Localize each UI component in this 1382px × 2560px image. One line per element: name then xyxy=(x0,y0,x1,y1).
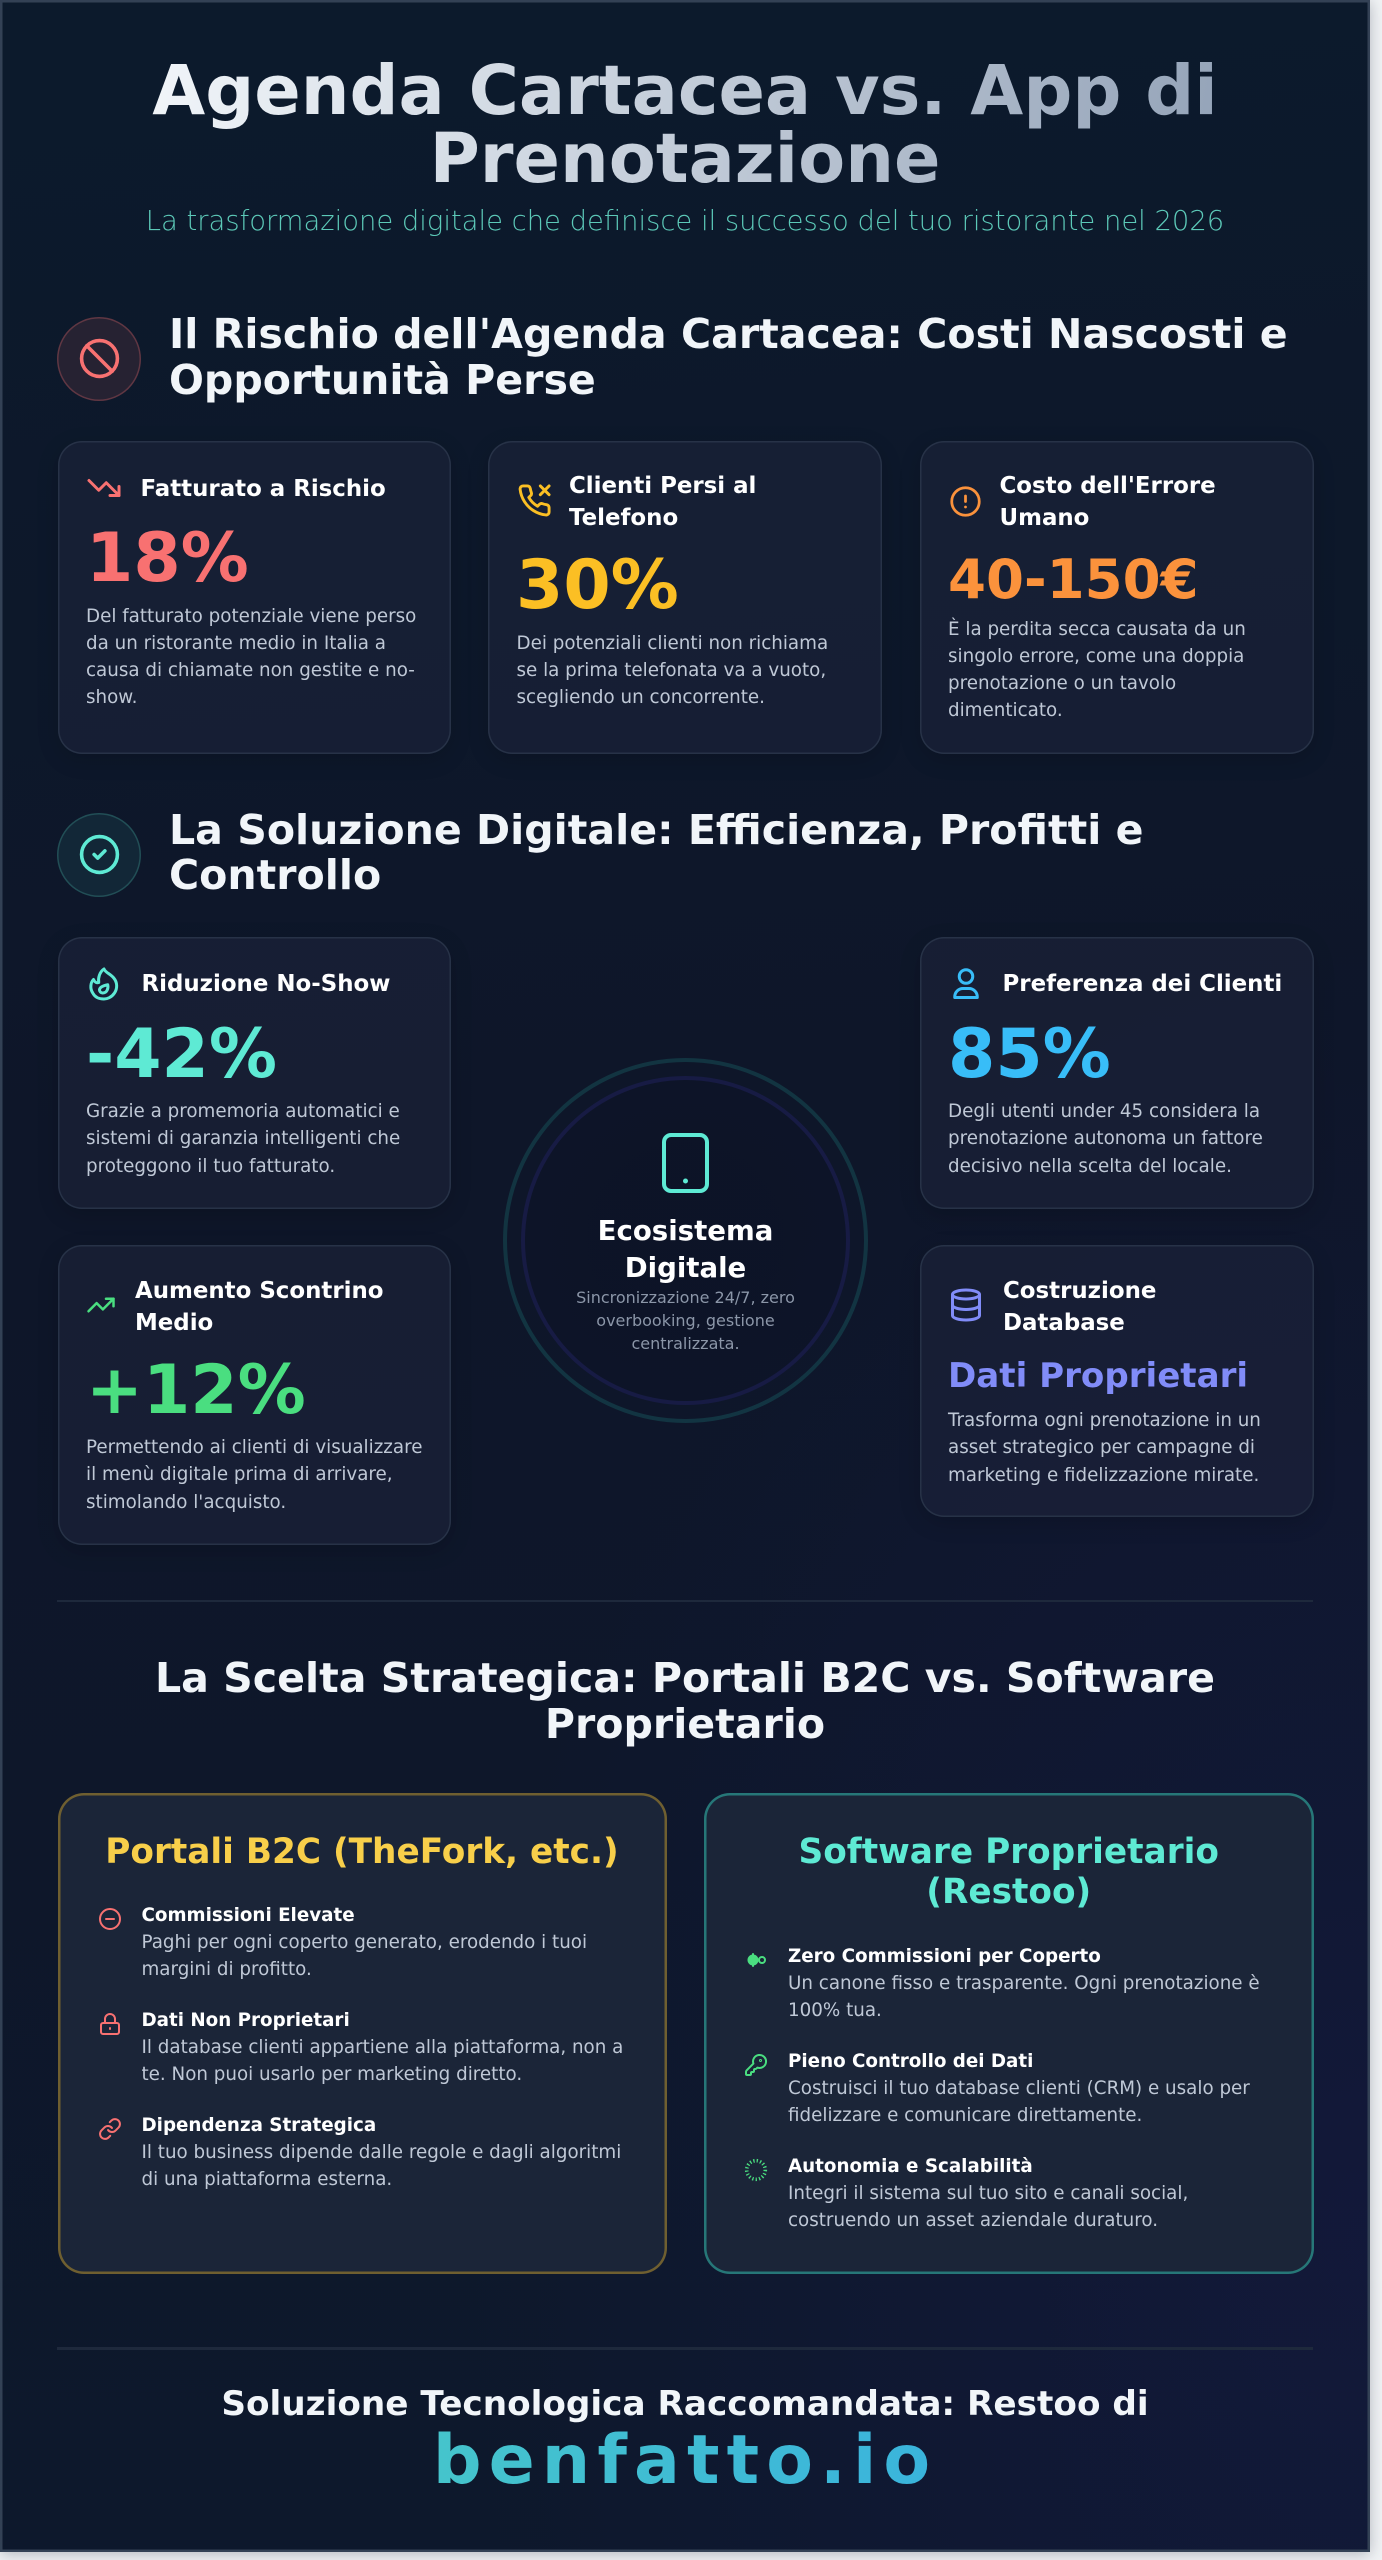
item: controllo dati: Costruisci il tuo database clienti (CRM) e usalo per xyxy=(788,2078,1250,2099)
item: controllo dati xyxy=(788,2050,1250,2126)
card description: Trasforma ogni prenotazione in un xyxy=(948,1410,1261,1431)
card description: singolo errore, come una doppia xyxy=(948,646,1244,667)
card title: Umano xyxy=(1000,505,1089,531)
card title xyxy=(135,1278,384,1336)
hub description: Sincronizzazione 24/7, zero xyxy=(576,1288,795,1307)
card title: Aumento Scontrino xyxy=(135,1278,384,1304)
card description: causa di chiamate non gestite e no- xyxy=(86,660,415,681)
footer brand: benfatto.io xyxy=(433,2421,937,2500)
title xyxy=(152,51,1218,199)
hub description xyxy=(576,1288,795,1353)
stat value: +12% xyxy=(86,1350,306,1430)
icon: trending down xyxy=(87,478,121,498)
icon: user xyxy=(953,968,979,999)
hub title: Ecosistema xyxy=(598,1214,773,1247)
heading: risk section xyxy=(169,310,1288,404)
item: zero commissioni xyxy=(788,1946,1260,2021)
icon: tablet xyxy=(662,1133,709,1193)
card description: proteggono il tuo fatturato. xyxy=(86,1156,335,1177)
item: zero commissioni: Un canone fisso e trasparente. Ogni prenotazione è xyxy=(788,1973,1260,1994)
card description: da un ristorante medio in Italia a xyxy=(86,633,386,654)
card description: stimolando l'acquisto. xyxy=(86,1492,286,1513)
icon: trending up xyxy=(87,1297,115,1313)
subtitle: La trasformazione digitale che definisce il successo del tuo ristorante nel 2026 xyxy=(146,206,1224,236)
icon: dashed scale xyxy=(744,2158,768,2182)
card description: prenotazione autonoma un fattore xyxy=(948,1128,1263,1149)
heading: solution section: La Soluzione Digitale: Efficienza, Profitti e xyxy=(169,806,1144,854)
card title: Costo dell'Errore xyxy=(1000,473,1216,499)
stat value: 85% xyxy=(948,1014,1111,1094)
card title: Costruzione xyxy=(1003,1278,1156,1304)
card description: decisivo nella scelta del locale. xyxy=(948,1156,1232,1177)
item: dipendenza: di una piattaforma esterna. xyxy=(142,2169,392,2190)
panel: preferenza clienti xyxy=(920,937,1314,1209)
icon: database xyxy=(951,1288,981,1322)
panel: software proprietario xyxy=(704,1793,1314,2274)
stat value: 18% xyxy=(86,518,249,598)
icon: lock xyxy=(100,2013,120,2035)
item: commissioni xyxy=(142,1904,587,1980)
stat value: Dati Proprietari xyxy=(948,1356,1248,1396)
card description: asset strategico per campagne di xyxy=(948,1437,1255,1458)
card title: Clienti Persi al xyxy=(569,473,756,499)
stat value: 40-150€ xyxy=(948,547,1199,611)
panel: riduzione no-show xyxy=(58,937,451,1209)
panel: portali b2c xyxy=(58,1793,666,2274)
item: commissioni: Commissioni Elevate xyxy=(142,1904,355,1926)
card description: Del fatturato potenziale viene perso xyxy=(86,606,416,627)
item: zero commissioni: Zero Commissioni per Coperto xyxy=(788,1946,1101,1966)
item: controllo dati: Pieno Controllo dei Dati xyxy=(788,2050,1033,2072)
item: autonomia: costruendo un asset aziendale duraturo. xyxy=(788,2210,1158,2231)
item: dati: te. Non puoi usarlo per marketing diretto. xyxy=(142,2064,522,2085)
title: Agenda Cartacea vs. App di xyxy=(152,51,1218,131)
panel: clienti persi xyxy=(488,441,882,754)
icon: section solution badge xyxy=(57,813,141,897)
item: autonomia: Integri il sistema sul tuo sito e canali social, xyxy=(788,2183,1188,2204)
card title xyxy=(1003,1278,1156,1336)
item: zero commissioni: 100% tua. xyxy=(788,2000,882,2021)
card description xyxy=(948,1410,1261,1486)
card title: Medio xyxy=(135,1310,213,1336)
card description: prenotazione o un tavolo xyxy=(948,673,1176,694)
card description: show. xyxy=(86,687,137,708)
icon: section risk badge xyxy=(57,317,141,401)
item: commissioni: margini di profitto. xyxy=(142,1959,312,1980)
heading: strategic choice xyxy=(155,1654,1215,1748)
icon: phone missed xyxy=(518,484,551,516)
card description: dimenticato. xyxy=(948,700,1063,721)
card description xyxy=(516,633,828,708)
hub title xyxy=(598,1214,773,1284)
card title xyxy=(569,473,756,531)
card description: È la perdita secca causata da un xyxy=(948,619,1246,640)
item: autonomia xyxy=(788,2156,1188,2231)
card title: Fatturato a Rischio xyxy=(140,476,386,502)
card description xyxy=(948,1101,1263,1177)
item: dipendenza: Dipendenza Strategica xyxy=(142,2114,376,2136)
panel title: (Restoo) xyxy=(926,1872,1091,1912)
panel title xyxy=(799,1832,1219,1912)
card title: Telefono xyxy=(569,505,678,531)
icon: alert circle xyxy=(950,486,981,517)
item: controllo dati: fidelizzare e comunicare direttamente. xyxy=(788,2105,1142,2126)
card description: sistemi di garanzia intelligenti che xyxy=(86,1128,400,1149)
card title: Database xyxy=(1003,1310,1125,1336)
title: Prenotazione xyxy=(430,119,940,199)
hub description: overbooking, gestione xyxy=(596,1311,775,1330)
card description xyxy=(86,606,416,708)
item: dipendenza xyxy=(142,2114,621,2190)
heading: strategic choice: Proprietario xyxy=(545,1700,825,1748)
heading: risk section: Il Rischio dell'Agenda Cartacea: Costi Nascosti e xyxy=(169,310,1288,358)
icon: zero commission xyxy=(748,1953,766,1967)
item: dipendenza: Il tuo business dipende dalle regole e dagli algoritmi xyxy=(142,2142,621,2163)
card title xyxy=(1000,473,1216,531)
card title: Riduzione No-Show xyxy=(142,971,390,997)
panel: costo errore xyxy=(920,441,1314,754)
footer text: Soluzione Tecnologica Raccomandata: Restoo di xyxy=(221,2384,1149,2424)
card description xyxy=(86,1101,400,1177)
item: commissioni: Paghi per ogni coperto generato, erodendo i tuoi xyxy=(142,1932,587,1953)
heading: risk section: Opportunità Perse xyxy=(169,356,596,404)
panel title: Software Proprietario xyxy=(799,1832,1219,1872)
item: dati: Il database clienti appartiene alla piattaforma, non a xyxy=(142,2037,623,2058)
card description: scegliendo un concorrente. xyxy=(516,687,765,708)
panel: costruzione database xyxy=(920,1245,1314,1517)
icon: flame xyxy=(89,967,118,1000)
stat value: -42% xyxy=(86,1014,277,1094)
heading: solution section xyxy=(169,806,1144,899)
icon: key xyxy=(745,2054,768,2076)
card description: Grazie a promemoria automatici e xyxy=(86,1101,400,1122)
inner ring xyxy=(521,1076,850,1405)
card description: il menù digitale prima di arrivare, xyxy=(86,1464,393,1485)
panel: aumento scontrino xyxy=(58,1245,451,1545)
item: dati xyxy=(142,2010,623,2085)
card description: marketing e fidelizzazione mirate. xyxy=(948,1465,1259,1486)
card description: Dei potenziali clienti non richiama xyxy=(516,633,828,654)
icon: link xyxy=(99,2118,121,2140)
panel: fatturato a rischio xyxy=(58,441,451,754)
item: dati: Dati Non Proprietari xyxy=(142,2010,350,2030)
heading: solution section: Controllo xyxy=(169,851,381,899)
card description: Degli utenti under 45 considera la xyxy=(948,1101,1260,1122)
diagram: ecosistema digitale hub xyxy=(503,1058,868,1423)
card description: Permettendo ai clienti di visualizzare xyxy=(86,1437,422,1458)
card description xyxy=(86,1437,422,1513)
card title: Preferenza dei Clienti xyxy=(1002,971,1282,997)
card description xyxy=(948,618,1246,721)
stat value: 30% xyxy=(516,546,679,624)
panel title: Portali B2C (TheFork, etc.) xyxy=(105,1832,619,1872)
hub title: Digitale xyxy=(625,1251,746,1284)
item: autonomia: Autonomia e Scalabilità xyxy=(788,2156,1033,2176)
heading: strategic choice: La Scelta Strategica: Portali B2C vs. Software xyxy=(155,1654,1215,1702)
card description: se la prima telefonata va a vuoto, xyxy=(516,660,826,681)
icon: minus circle xyxy=(99,1908,121,1930)
hub description: centralizzata. xyxy=(631,1334,740,1353)
